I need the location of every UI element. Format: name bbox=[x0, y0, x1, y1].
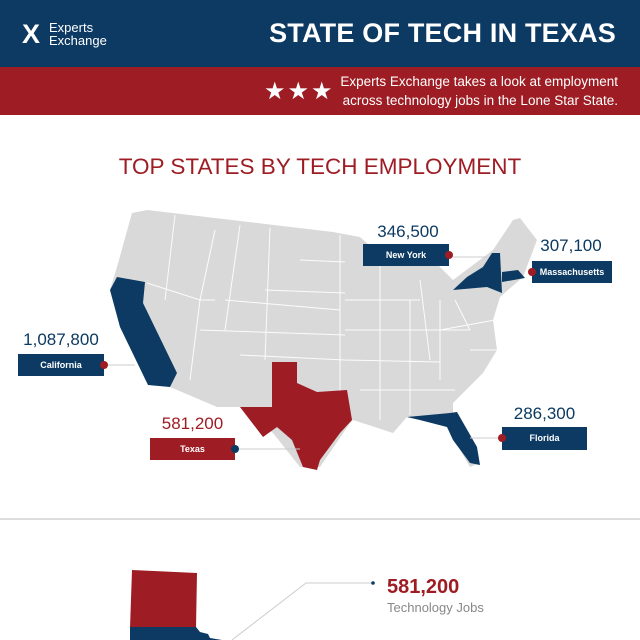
state: California bbox=[110, 277, 177, 387]
callout: Texas: 581,200 bbox=[162, 414, 223, 433]
logo: Experts bbox=[49, 20, 93, 35]
state: Texas bbox=[240, 362, 352, 470]
intro text: Experts Exchange takes a look at employment across technology jobs in the Lone Star State. bbox=[340, 74, 618, 108]
callout: California bbox=[18, 330, 108, 376]
callout: Massachusetts: 307,100 bbox=[540, 236, 602, 255]
callout: Texas bbox=[150, 414, 239, 460]
logo bbox=[22, 19, 107, 49]
callout: New York: 346,500 bbox=[377, 222, 439, 241]
callout: Florida bbox=[498, 404, 587, 450]
callout: California: California bbox=[40, 360, 82, 370]
state: New York bbox=[453, 253, 502, 293]
callout: New York bbox=[363, 222, 453, 266]
callout: Massachusetts bbox=[528, 236, 612, 283]
callout: Florida: Florida bbox=[529, 433, 560, 443]
callout: California: 1,087,800 bbox=[23, 330, 99, 349]
texas detail graphic bbox=[130, 570, 375, 640]
subtitle bar bbox=[0, 67, 640, 115]
state: Massachusetts bbox=[502, 270, 525, 282]
callout: New York: New York bbox=[386, 250, 426, 260]
stat: tech jobs bbox=[387, 576, 484, 615]
section heading: TOP STATES BY TECH EMPLOYMENT bbox=[119, 154, 521, 179]
title: STATE OF TECH IN TEXAS bbox=[269, 18, 616, 48]
callout: Texas: Texas bbox=[180, 444, 205, 454]
logo: Exchange bbox=[49, 33, 107, 48]
state: Florida bbox=[407, 412, 480, 465]
logo: X bbox=[22, 19, 40, 49]
callout: Florida: 286,300 bbox=[514, 404, 575, 423]
stat: tech jobs: 581,200 bbox=[387, 576, 459, 598]
stat: tech jobs: Technology Jobs bbox=[387, 600, 484, 615]
callout: Massachusetts: Massachusetts bbox=[540, 267, 604, 277]
header bar bbox=[0, 0, 640, 67]
icon: stars: ★★★ bbox=[264, 78, 335, 105]
